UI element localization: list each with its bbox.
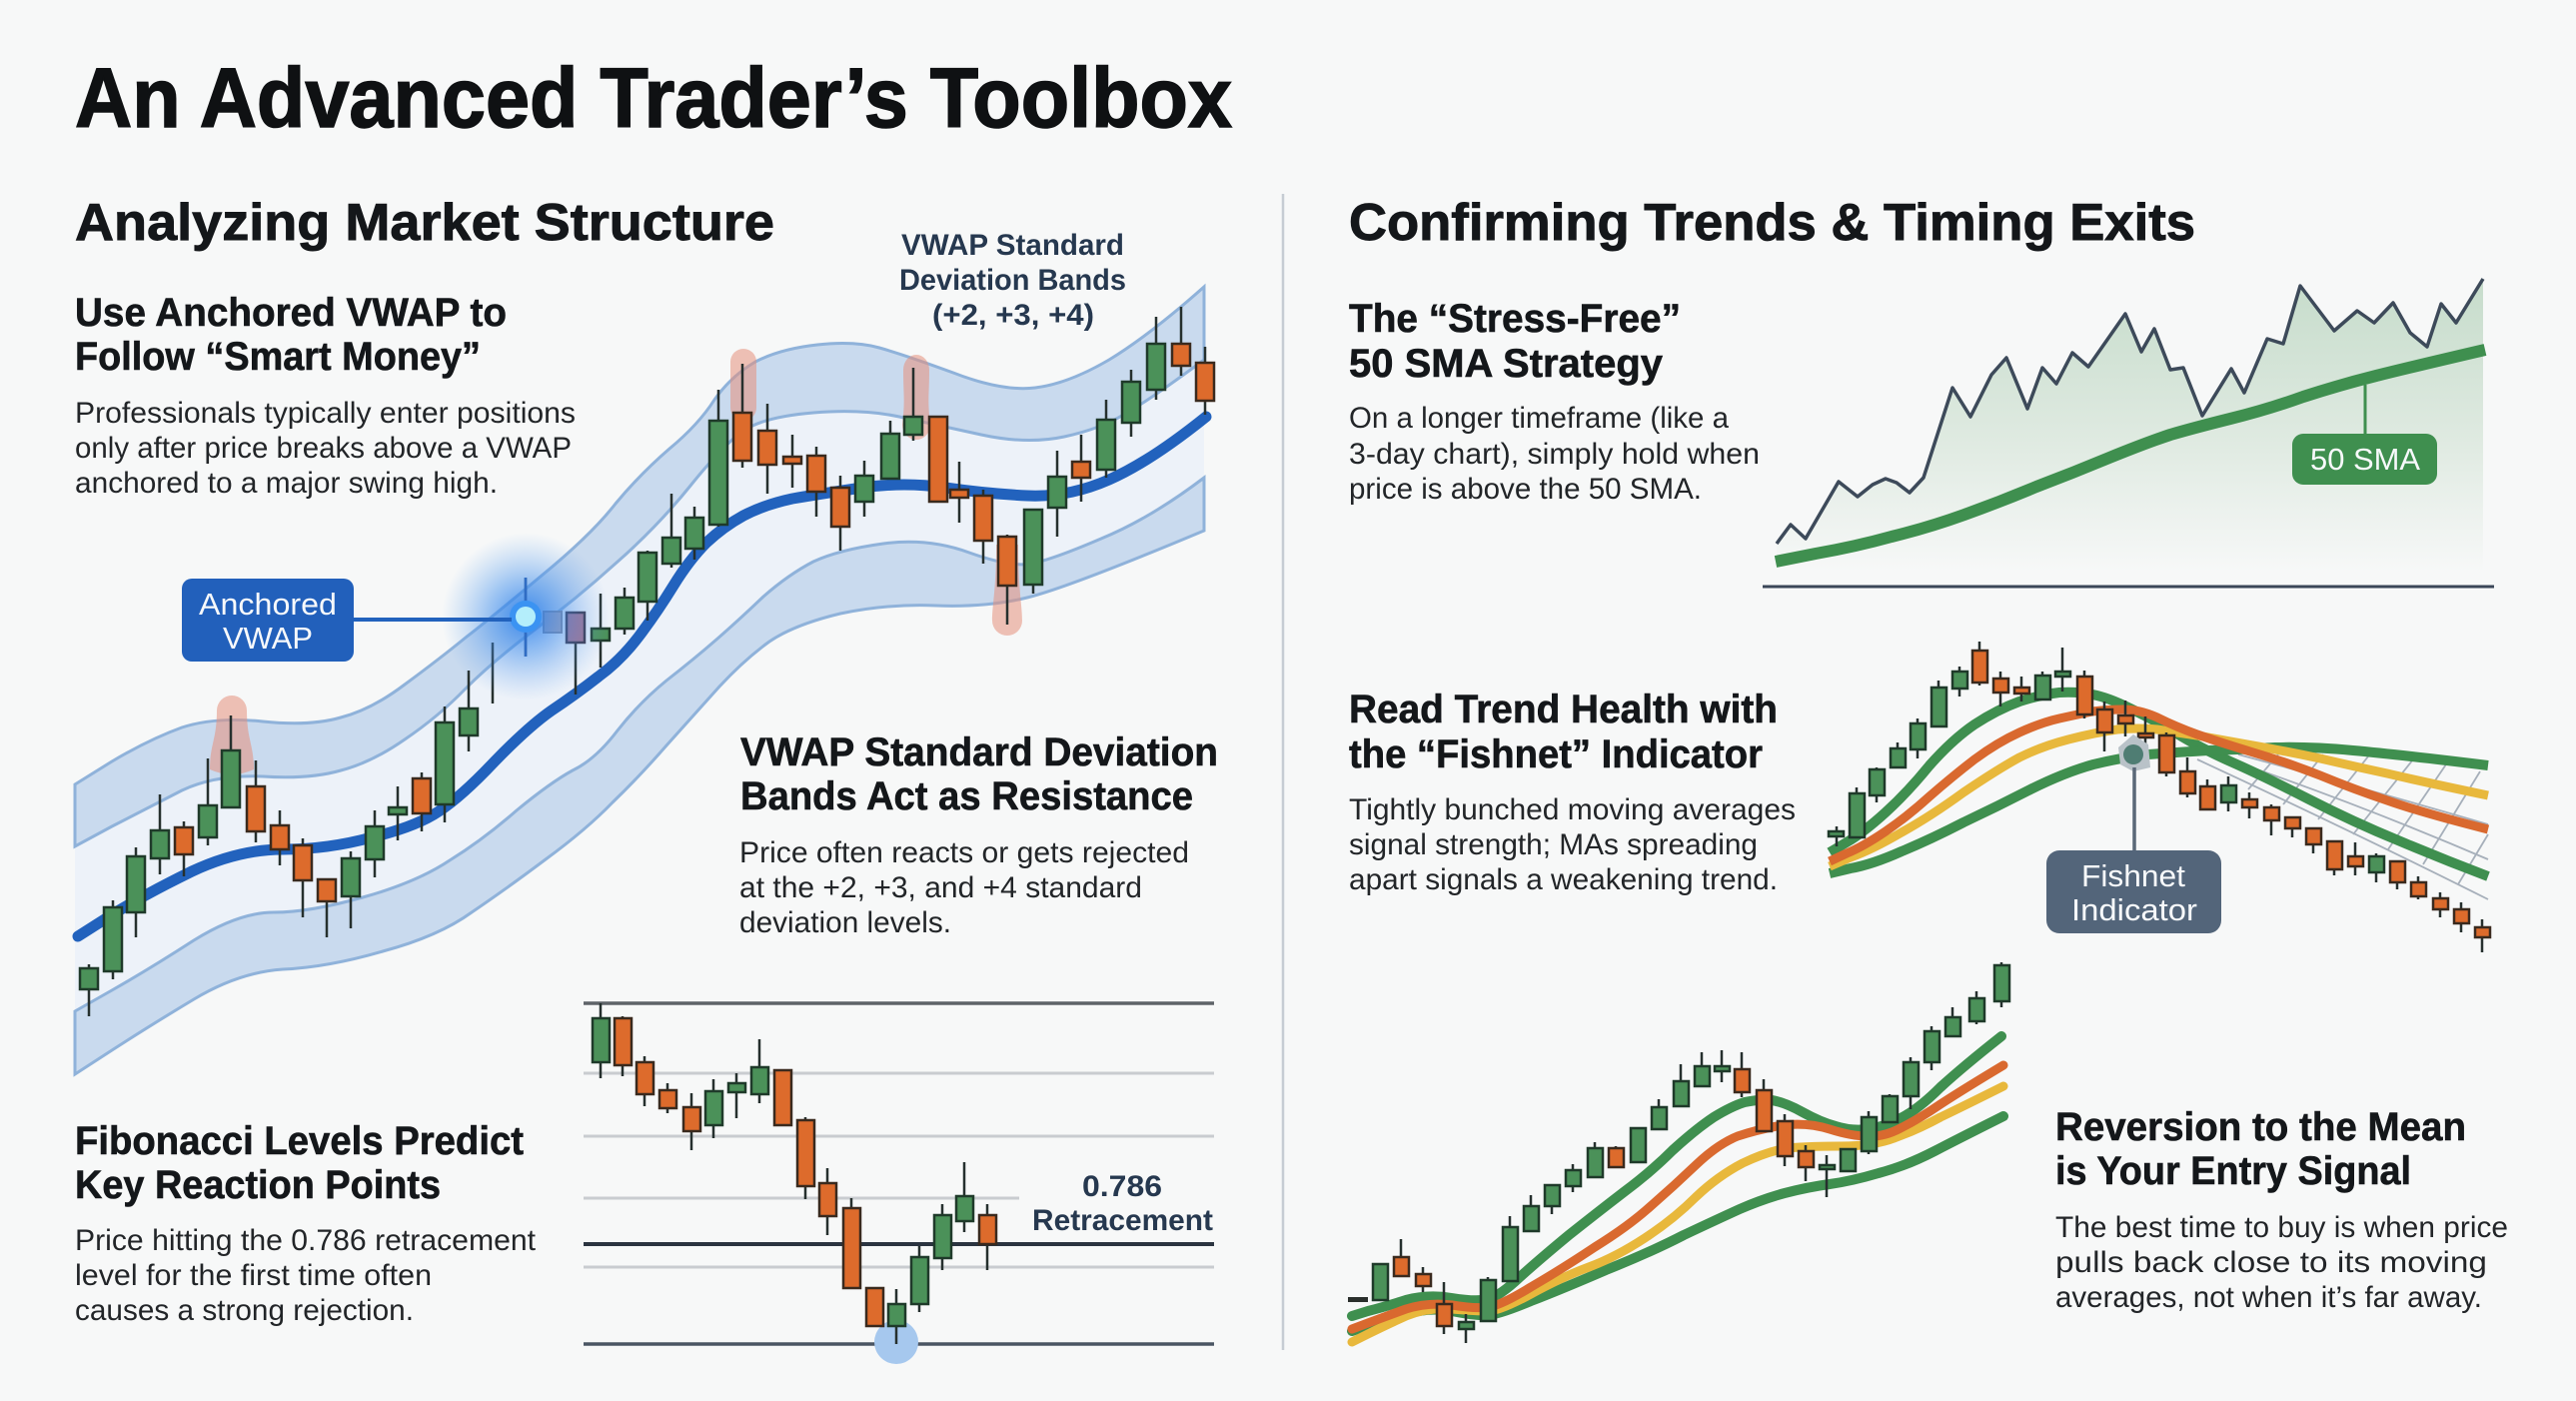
price line: [1777, 279, 2483, 544]
label: fishnet indicator: Fishnet: [2081, 858, 2185, 893]
label: VWAP standard deviation bands: VWAP Standard: [901, 229, 1124, 262]
text block: VWAP bands act as resistance: [739, 730, 1218, 939]
text block: fishnet indicator: [1349, 688, 1796, 896]
touch highlight circle: [874, 1320, 918, 1364]
band background: [75, 352, 1204, 1019]
text block: use anchored VWAP: Follow “Smart Money”: [75, 335, 481, 379]
fibonacci candlesticks: [593, 1003, 996, 1344]
text block: 50 SMA strategy: [1349, 297, 1760, 506]
rejection highlights: [210, 349, 1022, 774]
text block: VWAP bands act as resistance: deviation levels.: [739, 906, 951, 939]
label: 50 SMA: 50 SMA: [2310, 442, 2420, 477]
text block: 50 SMA strategy: On a longer timeframe (like a: [1349, 402, 1729, 435]
heading: confirming trends and timing exits: Confirming Trends & Timing Exits: [1349, 194, 2195, 252]
text block: 50 SMA strategy: 3-day chart), simply hold when: [1349, 438, 1760, 471]
label: VWAP standard deviation bands: Deviation Bands: [899, 264, 1126, 297]
connector: SMA label: [2364, 385, 2366, 436]
text block: fibonacci levels: Price hitting the 0.786 retracement: [75, 1224, 537, 1257]
text block: reversion to the mean: pulls back close to its moving: [2055, 1246, 2487, 1279]
text block: VWAP bands act as resistance: Bands Act as Resistance: [740, 774, 1193, 818]
text block: fibonacci levels: [75, 1119, 537, 1327]
label: 50 SMA: [2292, 434, 2437, 485]
fibonacci level lines: [584, 1003, 1214, 1344]
baseline axis: [1763, 586, 2494, 588]
chart: reversion to the mean: [1349, 962, 2009, 1343]
text block: VWAP bands act as resistance: VWAP Standard Deviation: [740, 730, 1218, 774]
text block: fibonacci levels: causes a strong rejection.: [75, 1294, 414, 1327]
label: 0.786 retracement: [1032, 1170, 1213, 1237]
text block: reversion to the mean: is Your Entry Signal: [2055, 1149, 2411, 1193]
chart: fishnet moving averages: [1829, 642, 2490, 952]
reversion candlesticks: [1349, 962, 2009, 1343]
area fill under price: [1777, 279, 2483, 572]
text block: fishnet indicator: the “Fishnet” Indicator: [1349, 732, 1763, 776]
moving average: orange: [1830, 709, 2488, 861]
heading: analyzing market structure: Analyzing Market Structure: [75, 194, 774, 252]
text block: 50 SMA strategy: price is above the 50 SMA.: [1349, 473, 1702, 506]
chart: 50 SMA with price line: [1763, 279, 2494, 587]
label: VWAP standard deviation bands: (+2, +3, +4): [932, 299, 1094, 332]
label: fishnet indicator: [2046, 850, 2221, 933]
moving average: top green: [1830, 693, 2488, 876]
lower deviation band: [75, 478, 1204, 1074]
text block: reversion to the mean: The best time to buy is when price: [2055, 1211, 2508, 1244]
text block: fibonacci levels: level for the first time often: [75, 1259, 432, 1292]
candlesticks: [80, 307, 1214, 1016]
connector: anchored VWAP label to anchor point: [350, 618, 512, 622]
anchor point glow: [442, 533, 610, 700]
text block: 50 SMA strategy: 50 SMA Strategy: [1349, 342, 1664, 386]
text block: fibonacci levels: Fibonacci Levels Predict: [75, 1119, 524, 1163]
connector: fishnet label: [2132, 767, 2136, 851]
text block: use anchored VWAP: Use Anchored VWAP to: [75, 291, 507, 335]
text block: fishnet indicator: Tightly bunched moving averages: [1349, 793, 1796, 826]
text block: fishnet indicator: apart signals a weakening trend.: [1349, 863, 1778, 896]
moving average: yellow: [1352, 1086, 2003, 1342]
text block: use anchored VWAP: Professionals typically enter positions: [75, 397, 576, 430]
moving average: yellow: [1830, 728, 2488, 866]
text block: reversion to the mean: Reversion to the Mean: [2055, 1105, 2466, 1149]
label: fishnet indicator: Indicator: [2071, 892, 2197, 927]
text block: VWAP bands act as resistance: Price often reacts or gets rejected: [739, 836, 1189, 869]
label: anchored VWAP: VWAP: [223, 621, 313, 656]
label: VWAP standard deviation bands: [899, 229, 1126, 332]
fishnet hub marker: [2118, 734, 2150, 771]
label: 0.786 retracement: 0.786: [1082, 1170, 1162, 1203]
text block: 50 SMA strategy: The “Stress-Free”: [1349, 297, 1681, 341]
VWAP line: [78, 417, 1206, 936]
label: anchored VWAP: Anchored: [199, 587, 337, 622]
title: An Advanced Trader’s Toolbox: [75, 51, 1232, 145]
50 SMA line: [1776, 350, 2485, 562]
net mesh: [2197, 751, 2488, 899]
text block: use anchored VWAP: only after price breaks above a VWAP: [75, 432, 572, 465]
moving average: bottom green: [1352, 1116, 2003, 1331]
chart: fibonacci retracement: [584, 1003, 1214, 1364]
text block: fishnet indicator: Read Trend Health with: [1349, 688, 1778, 731]
moving average: orange: [1352, 1065, 2003, 1329]
moving average: top green: [1352, 1036, 2001, 1316]
text block: reversion to the mean: averages, not when it’s far away.: [2055, 1281, 2482, 1314]
divider between columns: [1282, 194, 1284, 1350]
text block: use anchored VWAP: anchored to a major swing high.: [75, 467, 498, 500]
chart: anchored VWAP with standard deviation bands: [75, 287, 1214, 1074]
moving average: bottom green: [1830, 747, 2488, 873]
text block: reversion to the mean: [2055, 1105, 2508, 1314]
text block: VWAP bands act as resistance: at the +2, +3, and +4 standard: [739, 871, 1142, 904]
label: anchored VWAP: [182, 579, 354, 662]
text block: fibonacci levels: Key Reaction Points: [75, 1163, 441, 1207]
text block: fishnet indicator: signal strength; MAs spreading: [1349, 828, 1758, 861]
text block: use anchored VWAP: [75, 291, 576, 500]
fishnet candlesticks: [1829, 642, 2490, 952]
upper deviation band: [75, 287, 1204, 846]
label: 0.786 retracement: Retracement: [1032, 1204, 1213, 1237]
